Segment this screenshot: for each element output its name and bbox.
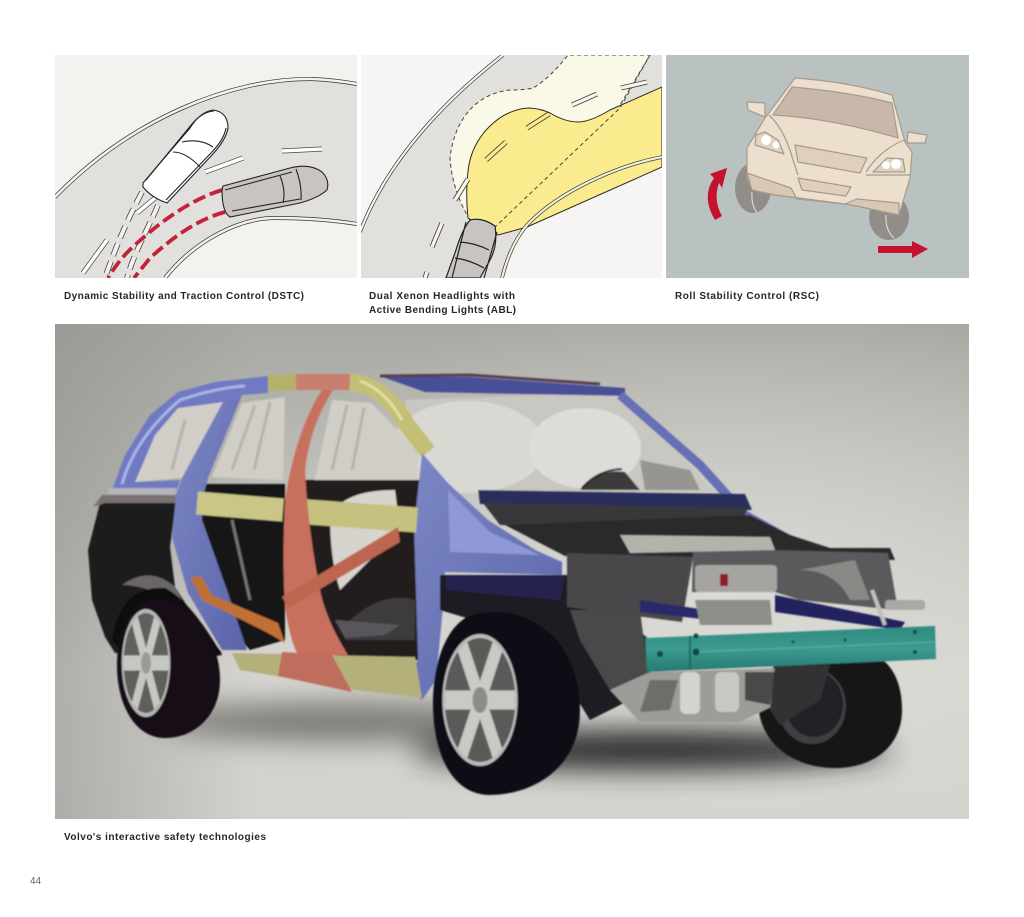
red skid marks: [108, 190, 225, 278]
caption: main photo: Volvo's interactive safety technologies: [64, 832, 266, 843]
orange lower brace: [190, 577, 285, 643]
front wheel: [433, 612, 580, 795]
far front wheel: [758, 650, 902, 768]
green front bumper beam: [645, 626, 936, 672]
dipped beam outer area: [450, 55, 650, 228]
icon: white car: [143, 110, 228, 203]
blue rear safety frame: [108, 376, 268, 650]
inner road edge: [502, 157, 662, 278]
caption: ABL: Active Bending Lights (ABL): [369, 305, 516, 316]
panel: roll stability control diagram: [666, 55, 969, 278]
windshield and interior view: [405, 392, 715, 495]
yellow and red roof sections: [268, 381, 428, 452]
road edge lines: [55, 79, 357, 278]
road edge lines: [360, 55, 503, 232]
caption: DSTC: Dynamic Stability and Traction Control (DSTC): [64, 291, 304, 302]
bending beam yellow area: [467, 87, 662, 235]
yellow door bars: [197, 503, 417, 520]
road surface: [55, 79, 357, 278]
caption: ABL: Dual Xenon Headlights with: [369, 291, 515, 302]
caption: ABL: [369, 291, 516, 316]
photo: cutaway Volvo safety cage: [55, 324, 969, 819]
page number: 44: [30, 876, 42, 887]
arrow: curved red up: [708, 168, 727, 220]
door opening dark interiors: [195, 480, 420, 665]
sill: [232, 652, 422, 698]
caption: RSC: Roll Stability Control (RSC): [675, 291, 819, 302]
panel: DSTC stability diagram: [55, 55, 357, 278]
photo backdrop: [55, 324, 969, 819]
rear wheel arch: [112, 588, 222, 660]
icon: car front view: [747, 78, 927, 215]
curtain airbag folds: [172, 402, 364, 470]
front wheel arch dark: [440, 575, 650, 720]
ground shadow: [160, 702, 890, 770]
engine underside silver parts: [610, 665, 830, 725]
icon: car from above: [446, 219, 497, 278]
icon: headlight lamps: [761, 135, 901, 169]
front airbags: [391, 401, 700, 493]
blue A pillar and firewall: [402, 453, 562, 700]
dashed beam edge: [494, 55, 650, 228]
road surface: [360, 55, 662, 278]
lane markings: [425, 82, 647, 278]
red B pillar: [282, 390, 400, 655]
icon: grey car: [222, 166, 328, 217]
blue roof rail and windshield frame: [380, 375, 790, 540]
rear body black: [88, 495, 222, 653]
tyre tracks of white car: [105, 192, 158, 278]
side curtain airbags: [135, 397, 418, 590]
engine bay structure: [567, 535, 925, 690]
lane markings: [83, 149, 322, 273]
panel: active bending headlights diagram: [360, 55, 662, 278]
arrow: straight red right: [878, 241, 928, 258]
rear wheel: [117, 599, 220, 738]
icon: wheels: [735, 163, 909, 240]
engine bay cowl: [478, 490, 895, 560]
